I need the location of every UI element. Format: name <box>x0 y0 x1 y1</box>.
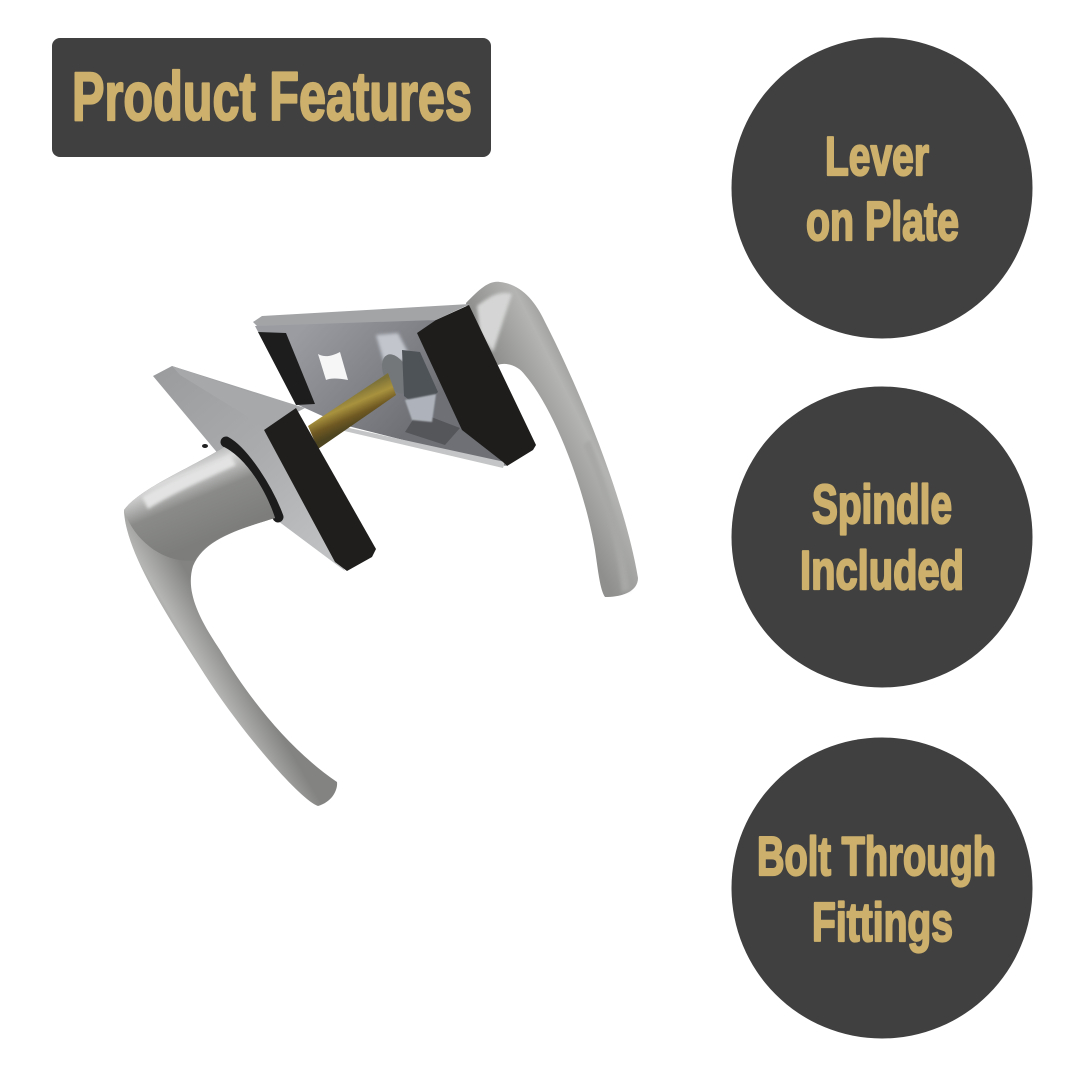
spindle nut <box>376 350 438 422</box>
feature circle 3 <box>732 738 1032 1038</box>
feature circle 3: Fittings <box>812 891 953 953</box>
product photo: lever handles on plates <box>124 38 1032 1038</box>
feature circle 1: Lever <box>825 125 929 187</box>
feature circle 2 <box>732 386 1032 688</box>
right black block <box>417 305 536 466</box>
feature circle 1 <box>732 38 1032 338</box>
left mounting plate <box>153 366 345 571</box>
title banner: Product Features <box>72 58 472 135</box>
left black block <box>264 408 376 571</box>
feature circle 2: Included <box>800 539 964 601</box>
spindle <box>308 373 396 449</box>
left lever handle <box>124 447 337 806</box>
black washer <box>226 442 278 517</box>
right mounting plate <box>253 304 506 468</box>
right lever handle <box>466 282 638 597</box>
feature circle 1: on Plate <box>806 190 959 252</box>
title banner <box>52 38 491 157</box>
feature circle 2: Spindle <box>812 473 952 535</box>
